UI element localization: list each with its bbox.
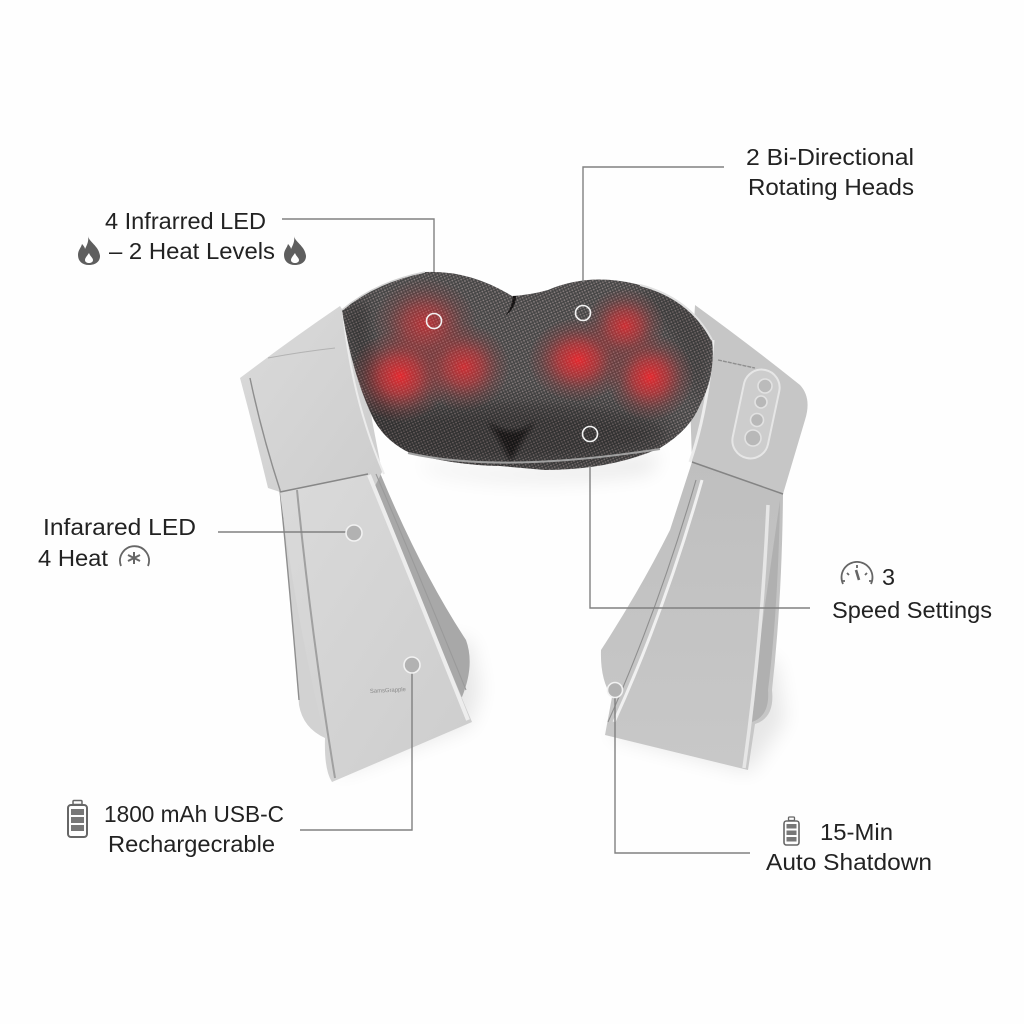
soft shadow	[335, 452, 785, 775]
control panel with four buttons	[729, 366, 783, 462]
callout: 3 speed settings	[832, 562, 992, 623]
left outer band	[280, 490, 345, 738]
callout: 4 infrared LED, 2 heat levels: 4 Infrarred LED	[105, 208, 266, 234]
callout: 15-minute auto shutdown: 15-Min	[820, 819, 893, 845]
mesh shading	[330, 270, 716, 472]
callout: 4 infrared LED, 2 heat levels: – 2 Heat Levels	[109, 238, 275, 264]
leader lines	[218, 167, 810, 853]
icon: battery	[68, 800, 87, 837]
callout: battery and USB-C charging: Rechargecrable	[108, 831, 275, 857]
callout: battery and USB-C charging: 1800 mAh USB-C	[104, 801, 284, 827]
left strap back layer	[360, 468, 470, 697]
product: neck massager	[240, 270, 808, 782]
callout: bi-directional rotating heads: Rotating Heads	[748, 174, 914, 200]
mesh massage pillow	[330, 270, 716, 472]
callout: 3 speed settings: 3	[882, 564, 895, 590]
callout marker dots	[346, 306, 622, 698]
callout: 3 speed settings: Speed Settings	[832, 597, 992, 623]
callout: bi-directional rotating heads: 2 Bi-Directional	[746, 144, 914, 170]
icon: small battery	[784, 817, 799, 845]
left shoulder panel	[240, 306, 382, 500]
left strap front panel	[280, 474, 472, 782]
tiny printed strap label: SamsGrapple	[370, 687, 407, 695]
callout: bi-directional rotating heads	[746, 144, 914, 200]
callout: 15-minute auto shutdown	[766, 817, 932, 875]
right shoulder panel	[690, 305, 808, 494]
icon: left flame	[78, 236, 100, 265]
callout: infrared LED, 4 heat: 4 Heat	[38, 545, 109, 571]
callout: 4 infrared LED, 2 heat levels	[78, 208, 306, 265]
callout: infrared LED, 4 heat: Infarared LED	[43, 514, 196, 540]
icon: right flame	[284, 236, 306, 265]
right strap full shape	[601, 462, 783, 770]
red infrared LED glows	[350, 278, 694, 422]
icon: heat dial	[120, 546, 149, 566]
callout: 15-minute auto shutdown: Auto Shatdown	[766, 849, 932, 875]
icon: speedometer	[842, 562, 873, 584]
callout: battery and USB-C charging	[68, 800, 284, 857]
callout: infrared LED, 4 heat	[38, 514, 196, 571]
